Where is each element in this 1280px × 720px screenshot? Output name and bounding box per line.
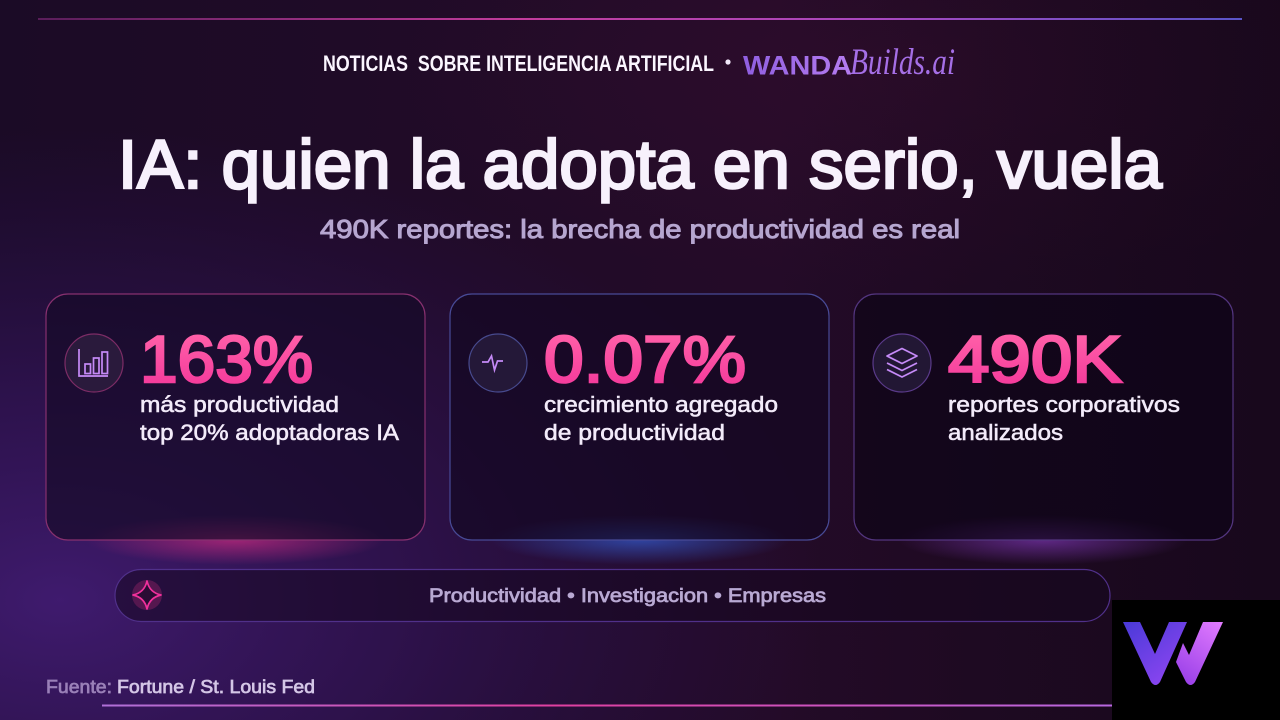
- stat description: [140, 392, 399, 445]
- icon: pulse: [469, 334, 527, 392]
- card glow: [490, 515, 790, 565]
- icon: bar chart: [65, 334, 123, 392]
- icon: layers: [873, 334, 931, 392]
- brand wordmark: [743, 42, 955, 83]
- stat description: analizados: [948, 420, 1063, 445]
- brand wordmark: WANDA: [743, 50, 852, 80]
- icon: sparkle: [132, 580, 162, 610]
- header separator dot: [725, 59, 731, 65]
- stat description: [544, 392, 778, 445]
- header: news label and brand: [323, 42, 955, 83]
- stat description: crecimiento agregado: [544, 392, 778, 417]
- panel: 0.07% growth: [450, 294, 829, 565]
- panel: 490K reports: [854, 294, 1233, 565]
- stat description: [948, 392, 1180, 445]
- stat description: reportes corporativos: [948, 392, 1180, 417]
- header label: NOTICIAS SOBRE INTELIGENCIA ARTIFICIAL: [323, 51, 714, 76]
- stat description: más productividad: [140, 392, 339, 417]
- card glow: [898, 515, 1188, 565]
- logo: W mark on black tile: [1112, 600, 1280, 720]
- tag pill: [115, 570, 1110, 622]
- card body: [46, 294, 425, 540]
- source line: Fuente:: [46, 677, 112, 697]
- subtitle: 490K reportes: la brecha de productividad es real: [320, 214, 960, 244]
- pill body: [115, 570, 1110, 622]
- stat value: 490K: [948, 322, 1122, 396]
- panel: 163% productivity: [46, 294, 425, 565]
- stat value: 163%: [140, 322, 313, 396]
- card body: [854, 294, 1233, 540]
- title: IA: quien la adopta en serio, vuela: [118, 126, 1163, 203]
- source line: Fortune / St. Louis Fed: [117, 677, 315, 697]
- bottom accent line: [102, 704, 1112, 706]
- card glow: [85, 515, 385, 565]
- stat description: de productividad: [544, 420, 725, 445]
- brand wordmark: Builds.ai: [850, 42, 955, 83]
- card body: [450, 294, 829, 540]
- top accent line: [38, 18, 1242, 20]
- stat value: 0.07%: [544, 322, 746, 396]
- stat description: top 20% adoptadoras IA: [140, 420, 399, 445]
- topic tags: Productividad • Investigacion • Empresas: [429, 585, 826, 607]
